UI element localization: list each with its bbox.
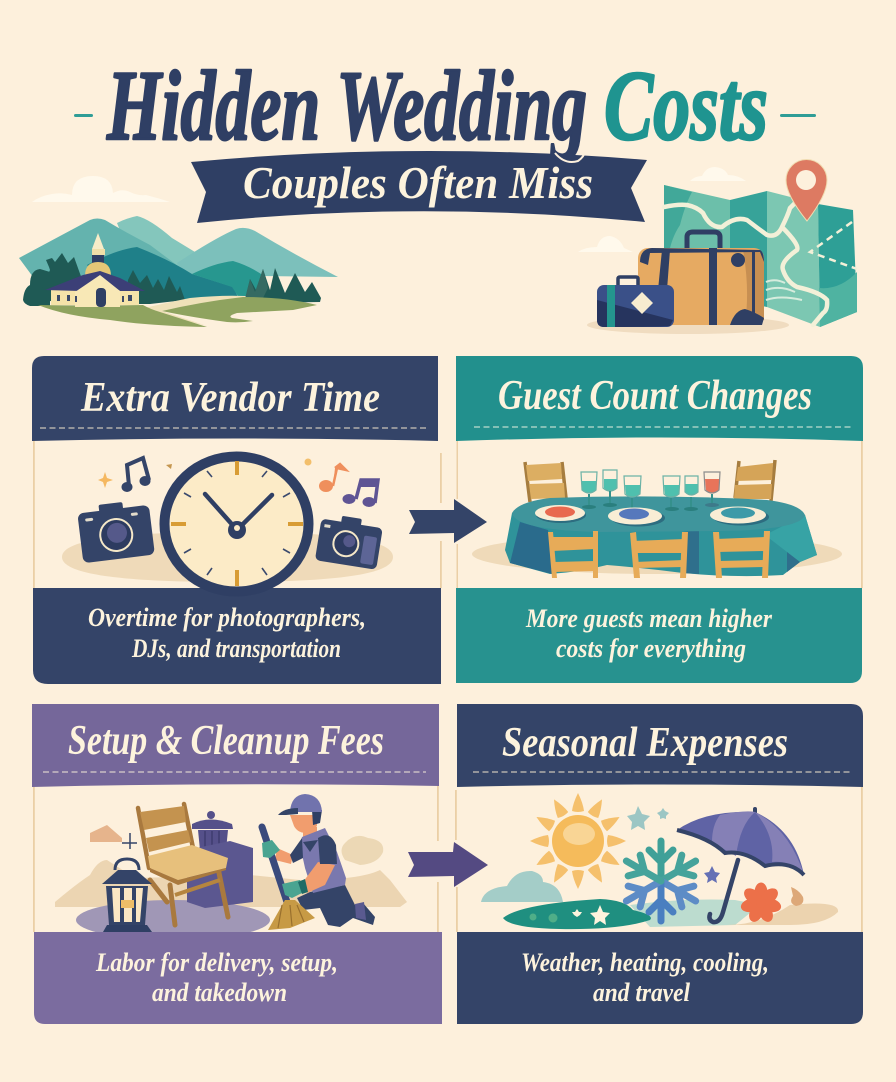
arrow: extra vendor time to guest count bbox=[409, 499, 487, 543]
arrow: setup fees to seasonal expenses bbox=[408, 842, 488, 887]
description band: DJs, and transportation bbox=[131, 634, 341, 663]
panel frame bbox=[33, 441, 442, 588]
illustration: seasons bbox=[481, 793, 838, 929]
clock bbox=[164, 456, 308, 592]
description band: More guests mean higher bbox=[525, 604, 773, 633]
heading band: Extra Vendor Time bbox=[80, 375, 380, 421]
panel frame bbox=[455, 786, 863, 932]
small suitcase bbox=[597, 277, 674, 327]
panel: seasonal expenses bbox=[455, 704, 863, 1024]
panel frame bbox=[456, 441, 863, 588]
description band: Weather, heating, cooling, bbox=[521, 948, 769, 977]
illustration: mountain church bbox=[19, 176, 338, 327]
sun bbox=[530, 793, 626, 889]
trash can bbox=[192, 811, 233, 850]
description band: and travel bbox=[593, 978, 691, 1007]
ground bbox=[38, 305, 207, 327]
subtitle ribbon bbox=[191, 151, 647, 223]
subtitle ribbon: Couples Often Miss bbox=[243, 157, 593, 208]
winding path bbox=[140, 296, 245, 326]
description band: costs for everything bbox=[556, 634, 746, 663]
description band: Labor for delivery, setup, bbox=[95, 948, 338, 977]
description band bbox=[456, 588, 862, 683]
description band: and takedown bbox=[152, 978, 287, 1007]
illustration: map and luggage bbox=[578, 159, 857, 334]
description band bbox=[33, 588, 441, 684]
music notes bbox=[127, 458, 149, 486]
orange flower bbox=[740, 882, 782, 924]
leaf bbox=[791, 887, 803, 906]
heading band bbox=[457, 704, 863, 787]
title: Costs bbox=[604, 50, 768, 161]
heading band bbox=[32, 704, 439, 787]
small stars bbox=[627, 806, 669, 830]
broom bbox=[262, 827, 287, 902]
rug bbox=[76, 900, 270, 940]
sparkles bbox=[98, 472, 113, 488]
tablecloth bbox=[505, 496, 817, 576]
ground shadow bbox=[587, 316, 789, 334]
description band bbox=[457, 932, 863, 1024]
tan backdrop bbox=[55, 860, 407, 907]
back chairs bbox=[525, 460, 775, 502]
ground bbox=[472, 534, 842, 574]
panel: setup and cleanup fees bbox=[32, 704, 442, 1024]
ground bbox=[62, 532, 393, 582]
heading band bbox=[32, 356, 438, 441]
folded map bbox=[664, 185, 857, 327]
large suitcase bbox=[638, 232, 764, 325]
legs bbox=[297, 885, 375, 927]
right camera bbox=[315, 513, 384, 570]
arms bbox=[275, 848, 293, 864]
umbrella bbox=[677, 809, 804, 922]
panel: extra vendor time bbox=[32, 356, 442, 684]
cloud bbox=[32, 176, 170, 202]
wine glasses bbox=[581, 470, 720, 511]
church bbox=[45, 233, 145, 307]
illustration: dinner table bbox=[472, 460, 842, 578]
heading band bbox=[456, 356, 863, 441]
lantern bbox=[102, 859, 152, 932]
box bbox=[187, 841, 253, 908]
pond stars bbox=[572, 905, 610, 925]
panel: guest count changes bbox=[456, 356, 863, 683]
location pin bbox=[786, 159, 827, 221]
gloves bbox=[262, 840, 280, 858]
description band bbox=[34, 932, 442, 1024]
mountains bbox=[19, 216, 338, 303]
title: Hidden Wedding bbox=[106, 50, 587, 161]
description band: Overtime for photographers, bbox=[88, 603, 366, 632]
head bbox=[290, 815, 317, 833]
clouds bbox=[690, 167, 746, 181]
left camera bbox=[77, 499, 155, 563]
heading band: Guest Count Changes bbox=[498, 373, 812, 419]
trees bbox=[23, 253, 321, 306]
front chairs bbox=[548, 531, 770, 578]
illustration: chair, lantern and sweeping worker bbox=[55, 794, 407, 940]
wooden chair bbox=[138, 804, 228, 925]
worker bbox=[262, 794, 375, 930]
plates bbox=[535, 505, 769, 526]
panel frame bbox=[33, 786, 439, 932]
heading band: Setup & Cleanup Fees bbox=[68, 718, 384, 764]
heading band: Seasonal Expenses bbox=[502, 720, 788, 766]
green pond bbox=[503, 899, 651, 929]
pale ground bbox=[630, 900, 760, 927]
cloud bbox=[481, 871, 563, 902]
illustration: clock, cameras, music bbox=[62, 456, 393, 592]
snowflake bbox=[620, 841, 702, 921]
torso bbox=[303, 827, 317, 842]
